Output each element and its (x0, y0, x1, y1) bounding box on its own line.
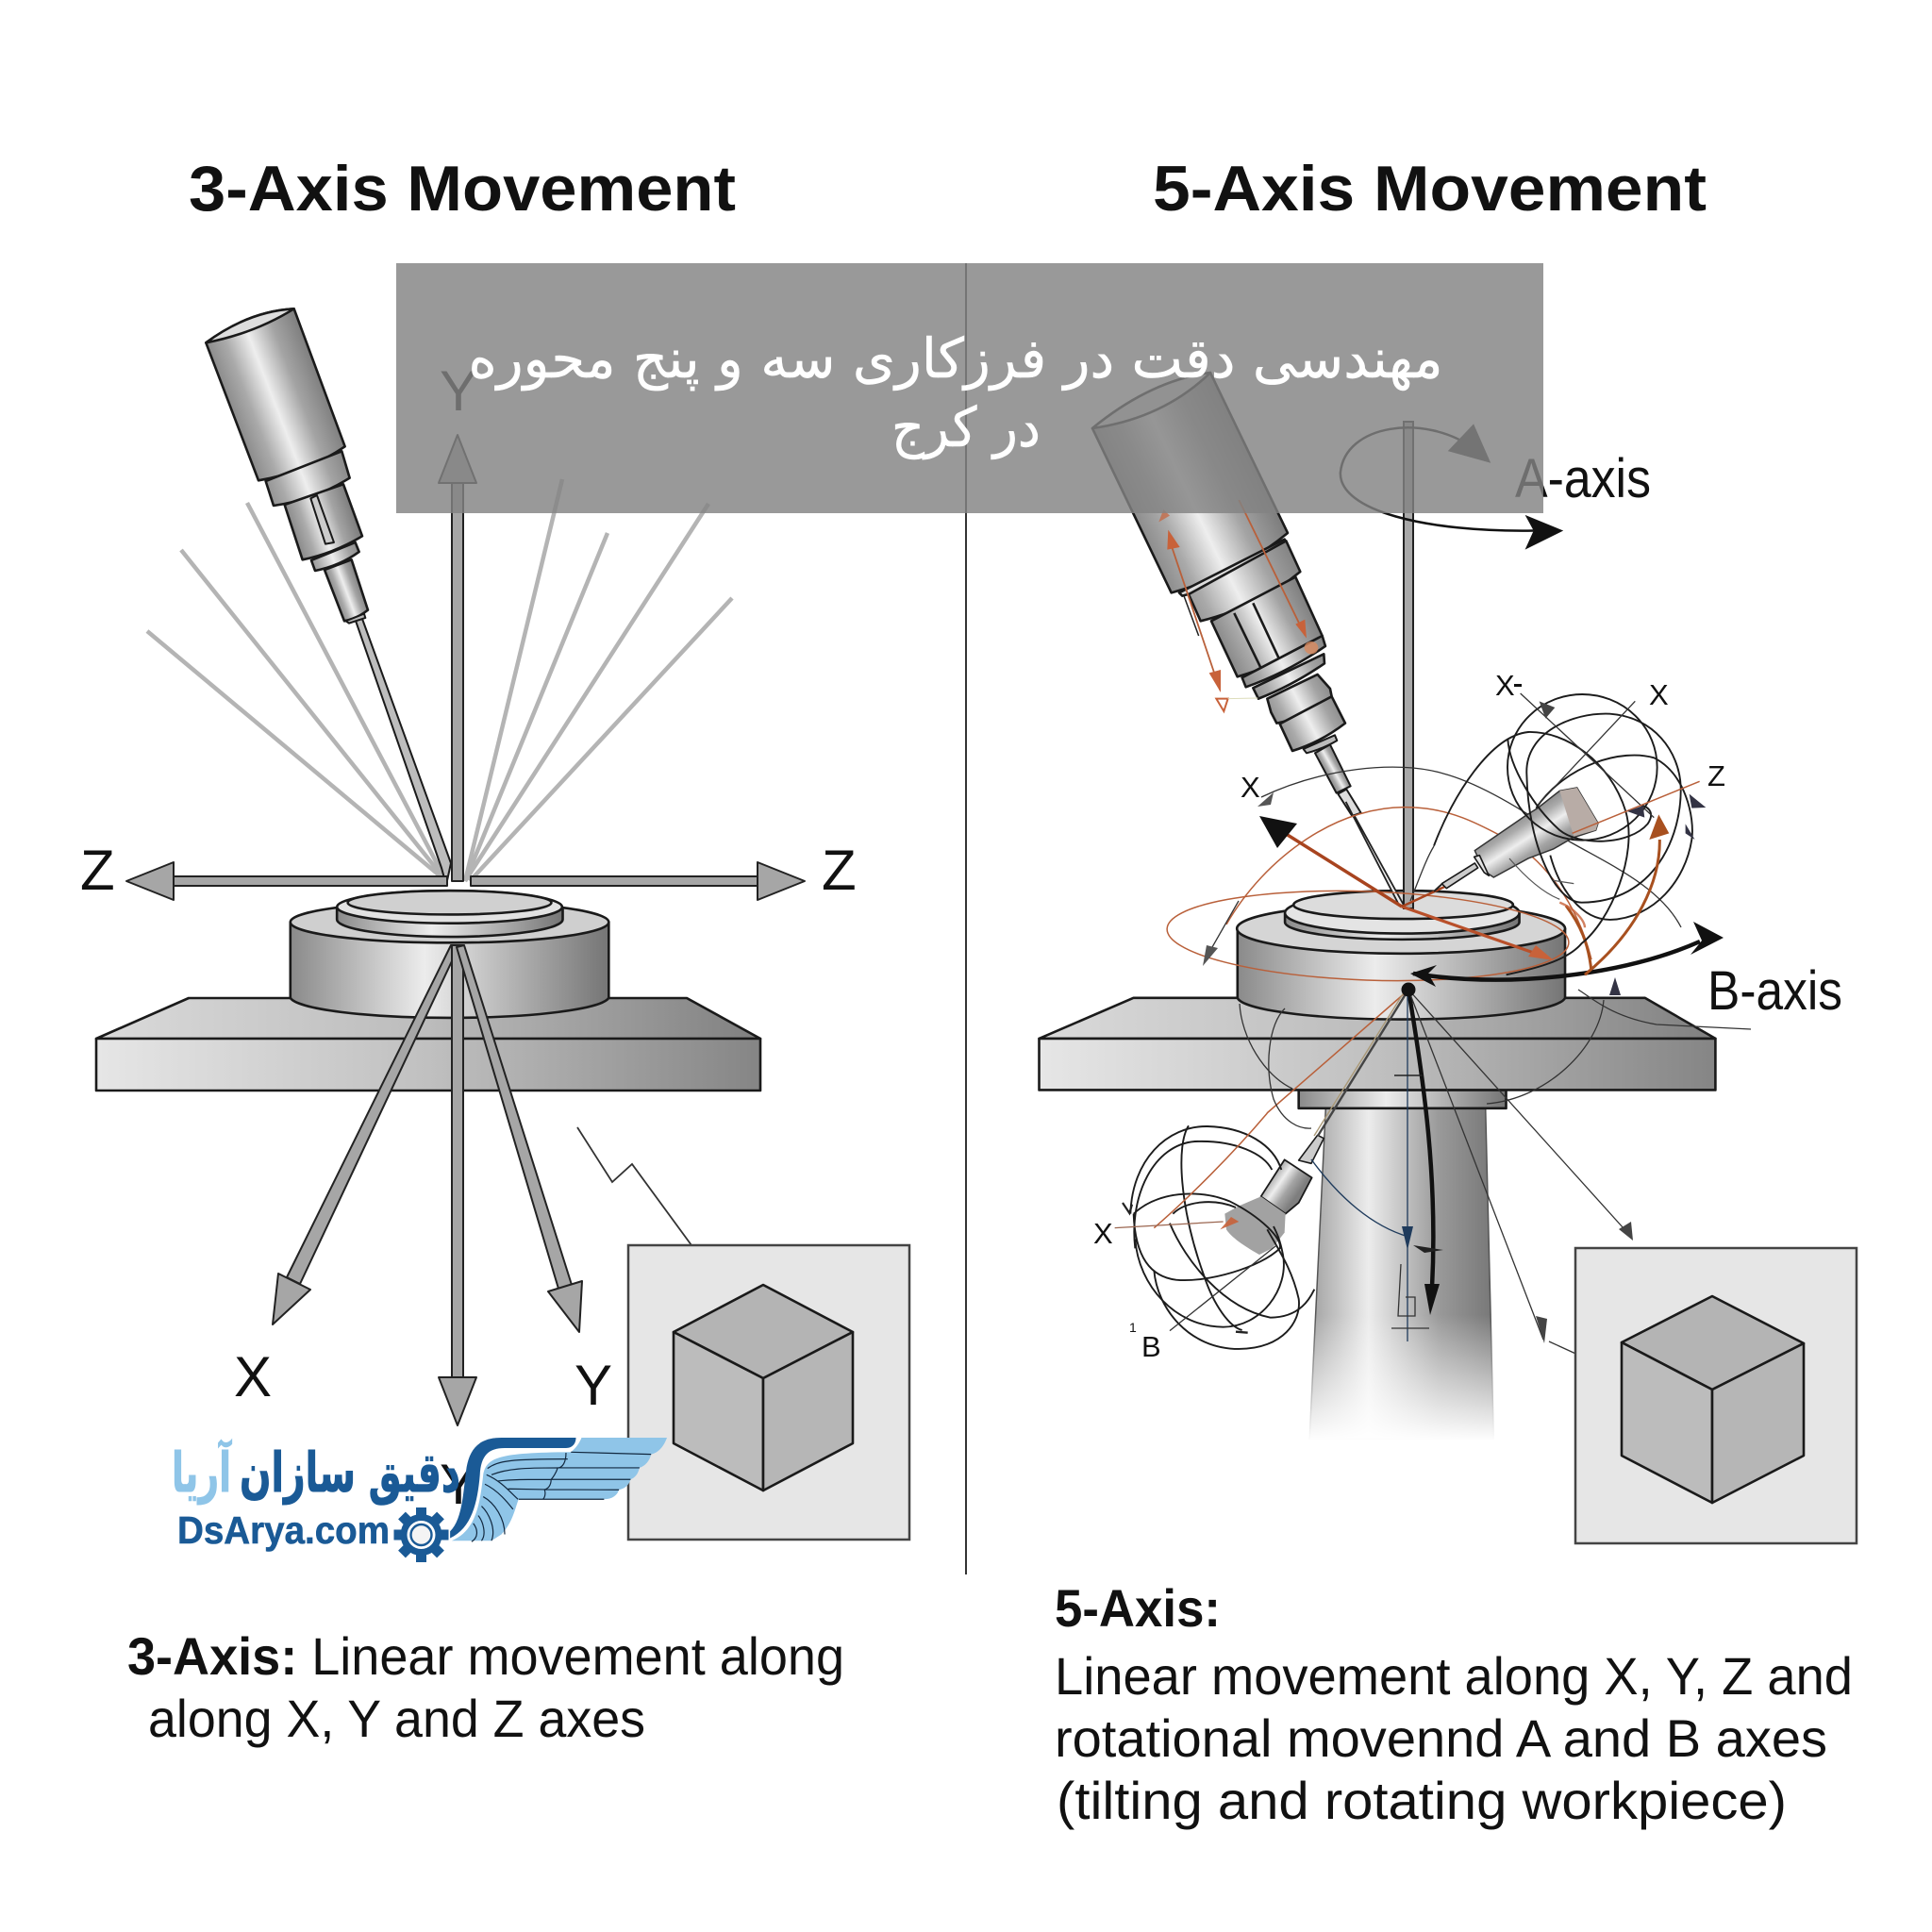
needle (356, 619, 451, 885)
axis labels: Z (80, 839, 115, 902)
text block: 3-axis description: along X, Y and Z axes (148, 1689, 645, 1748)
main spindle (1092, 373, 1404, 906)
panel: 5-axis diagram (1040, 373, 1857, 1543)
center divider (965, 263, 967, 1574)
text block: 5-axis description (1055, 1578, 1853, 1830)
text block: 5-axis description: 5-Axis: (1055, 1578, 1221, 1638)
small axis labels: X (1093, 1217, 1113, 1250)
machine plate (96, 998, 760, 1091)
lower auxiliary tool with rotation loops (1115, 1113, 1324, 1349)
label: B-axis: B-axis (1707, 960, 1842, 1022)
upper auxiliary tool with rotation loops (1434, 693, 1706, 974)
axis labels: Y (575, 1354, 612, 1417)
label: A-axis: A-axis (1515, 448, 1651, 509)
logo wordmark accent: آریا (172, 1439, 232, 1505)
small axis labels (1093, 669, 1725, 1363)
small axis labels: 1 (1129, 1320, 1137, 1335)
Y axis arrow right (457, 945, 582, 1332)
axis labels: Y (440, 359, 477, 423)
Y axis arrow down (439, 945, 476, 1425)
banner title line two: در کرج (891, 395, 1041, 460)
inset: workpiece cube (1575, 1248, 1857, 1543)
small axis labels: X (1495, 669, 1515, 702)
logo url: DsArya.com (177, 1508, 390, 1552)
machine plate (1040, 998, 1715, 1090)
Y axis arrow up (439, 435, 476, 881)
rotary table (1237, 891, 1565, 1020)
text block: 5-axis description: Linear movement along X, Y, Z and (1055, 1646, 1853, 1706)
A-axis rotation arrow (1341, 424, 1563, 550)
axis labels (80, 359, 857, 1516)
lines from pivot point (1240, 983, 1633, 1357)
banner title line one: مهندسی دقت در فرزکاری سه و پنج محوره (468, 326, 1443, 391)
text block: 5-axis description: rotational movennd A and B axes (1055, 1708, 1827, 1768)
heading: 3-Axis Movement: 3-Axis Movement (189, 153, 736, 225)
logo gear (394, 1507, 449, 1562)
text block: 5-axis description: (tilting and rotating workpiece) (1057, 1771, 1787, 1830)
orbit arcs and motion vectors (1165, 767, 1751, 1029)
callout line (577, 1127, 691, 1245)
inset: workpiece cube (628, 1245, 909, 1540)
logo wordmark: دقیق سازان (240, 1441, 460, 1506)
A-axis shaft (1404, 422, 1413, 908)
X axis arrow (273, 945, 458, 1324)
small axis labels: Z (1707, 759, 1725, 792)
heading: 5-Axis Movement: 5-Axis Movement (1153, 153, 1707, 225)
small axis labels: B (1141, 1330, 1161, 1363)
panel: 3-axis diagram (80, 308, 909, 1540)
fan of tool paths (147, 479, 732, 881)
logo: DsArya (172, 1438, 667, 1562)
axis labels: Z (822, 839, 857, 902)
title banner overlay (396, 263, 1543, 513)
small axis labels: X (1649, 678, 1669, 711)
text block: 3-axis description (127, 1626, 844, 1748)
orange spindle motion arrows (1158, 500, 1318, 711)
pedestal column (1299, 1090, 1507, 1441)
spindle (206, 308, 368, 624)
logo wing (450, 1438, 667, 1541)
axis labels: Y (440, 1453, 477, 1516)
axis labels: X (234, 1345, 272, 1408)
text block: 3-axis description: 3-Axis: Linear movement along (127, 1626, 844, 1686)
Z axis arrow left (126, 862, 447, 900)
small axis labels: X (1241, 771, 1260, 804)
Z axis arrow right (471, 862, 805, 900)
rotary table (291, 891, 608, 1018)
